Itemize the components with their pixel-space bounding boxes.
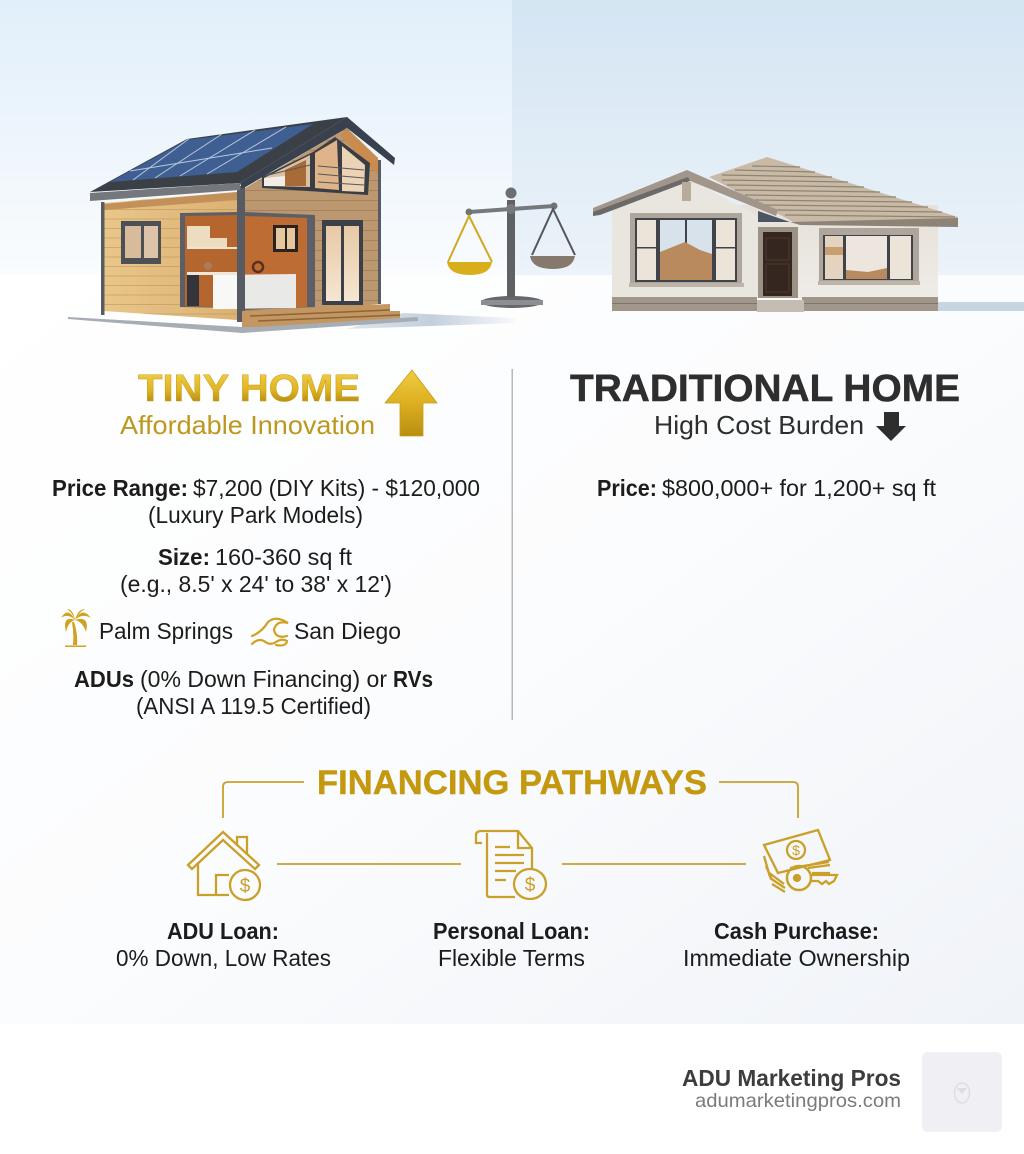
icon: cash and key bbox=[764, 830, 837, 892]
icon: palm tree bbox=[61, 609, 91, 647]
gable roof bbox=[593, 170, 778, 216]
left window bbox=[121, 221, 161, 264]
price range text: Price Range: bbox=[52, 475, 188, 501]
divider bbox=[512, 369, 513, 720]
scale base bbox=[481, 296, 543, 308]
kitchen small window bbox=[273, 225, 298, 252]
price range text: $7,200 (DIY Kits) - $120,000 bbox=[193, 475, 480, 501]
pathway: cash purchase: Immediate Ownership bbox=[683, 945, 910, 971]
heading: tiny home: TINY HOME bbox=[138, 368, 360, 410]
size text: (e.g., 8.5' x 24' to 38' x 12') bbox=[120, 571, 392, 597]
subheading: high cost burden: High Cost Burden bbox=[654, 410, 864, 440]
label: san diego: San Diego bbox=[294, 618, 401, 644]
deck steps bbox=[242, 304, 400, 327]
pathway: personal loan: Personal Loan: bbox=[433, 918, 590, 944]
roof bbox=[90, 117, 395, 201]
ground shadow bbox=[347, 313, 515, 329]
solar panels bbox=[110, 124, 313, 182]
brand url: adumarketingpros.com bbox=[695, 1090, 901, 1112]
label: palm springs: Palm Springs bbox=[99, 618, 233, 644]
illustration: traditional home bbox=[593, 157, 1024, 312]
left wall bbox=[103, 192, 237, 320]
pathway: personal loan bbox=[433, 918, 590, 971]
icon: document with dollar coin bbox=[476, 831, 546, 899]
footer branding bbox=[682, 1052, 1002, 1132]
icon: house with dollar coin bbox=[188, 832, 260, 900]
ADU and RV text: ADUs bbox=[74, 666, 134, 692]
panel: tiny home bbox=[52, 368, 486, 719]
illustration: balance scale bbox=[447, 188, 575, 308]
ADU and RV text: (ANSI A 119.5 Certified) bbox=[136, 693, 371, 719]
bracket lines bbox=[223, 782, 798, 818]
pathway: cash purchase: Cash Purchase: bbox=[714, 918, 879, 944]
door steps bbox=[757, 300, 804, 312]
open kitchen interior bbox=[180, 212, 315, 310]
right wall bbox=[245, 128, 378, 322]
gable vent bbox=[682, 182, 691, 201]
corner posts bbox=[101, 160, 381, 322]
counter bbox=[213, 274, 296, 309]
ADU and RV text: RVs bbox=[393, 666, 433, 692]
pathway: ADU loan: ADU Loan: bbox=[167, 918, 279, 944]
door bbox=[758, 227, 798, 298]
right silver pan bbox=[530, 209, 575, 269]
icon: wave bbox=[252, 619, 288, 646]
shaded porch recess bbox=[758, 211, 790, 222]
price text: $800,000+ for 1,200+ sq ft bbox=[662, 475, 937, 501]
icon: document with dollar coin: $ bbox=[525, 875, 536, 896]
price text: Price: bbox=[597, 475, 657, 501]
right window bbox=[818, 228, 920, 285]
connector lines bbox=[277, 863, 746, 865]
size text: 160-360 sq ft bbox=[215, 544, 353, 570]
heading: traditional home: TRADITIONAL HOME bbox=[570, 368, 960, 410]
panel: traditional home bbox=[570, 368, 960, 501]
icon: up arrow bbox=[385, 370, 437, 436]
base slab bbox=[68, 317, 418, 333]
subheading: affordable innovation: Affordable Innovation bbox=[120, 410, 375, 440]
ADU and RV text: (0% Down Financing) or bbox=[140, 666, 387, 692]
pathway: cash purchase bbox=[683, 918, 910, 971]
pathway: personal loan: Flexible Terms bbox=[438, 945, 585, 971]
brand name: ADU Marketing Pros bbox=[682, 1065, 901, 1091]
pathway: ADU loan: 0% Down, Low Rates bbox=[116, 945, 331, 971]
icon: cash and key: $ bbox=[792, 842, 800, 858]
size text: Size: bbox=[158, 544, 210, 570]
left gold pan bbox=[447, 216, 492, 275]
scale post and beam bbox=[507, 200, 515, 297]
pathway: ADU loan bbox=[116, 918, 331, 971]
shelves bbox=[187, 226, 227, 248]
walls bbox=[612, 205, 938, 298]
logo tile bbox=[922, 1052, 1002, 1132]
illustration: tiny home bbox=[68, 117, 515, 333]
sliding door bbox=[322, 220, 363, 305]
panel: financing pathways bbox=[116, 764, 910, 971]
price range text: (Luxury Park Models) bbox=[148, 502, 363, 528]
left window bbox=[629, 213, 744, 287]
stone base bbox=[612, 297, 938, 311]
heading: financing pathways: FINANCING PATHWAYS bbox=[317, 764, 707, 802]
gable window bbox=[262, 137, 370, 195]
icon: house with dollar coin: $ bbox=[240, 876, 251, 897]
icon: down arrow bbox=[876, 412, 906, 441]
gable trim bbox=[240, 117, 395, 189]
main roof bbox=[709, 157, 958, 227]
shadows bbox=[938, 302, 1024, 311]
